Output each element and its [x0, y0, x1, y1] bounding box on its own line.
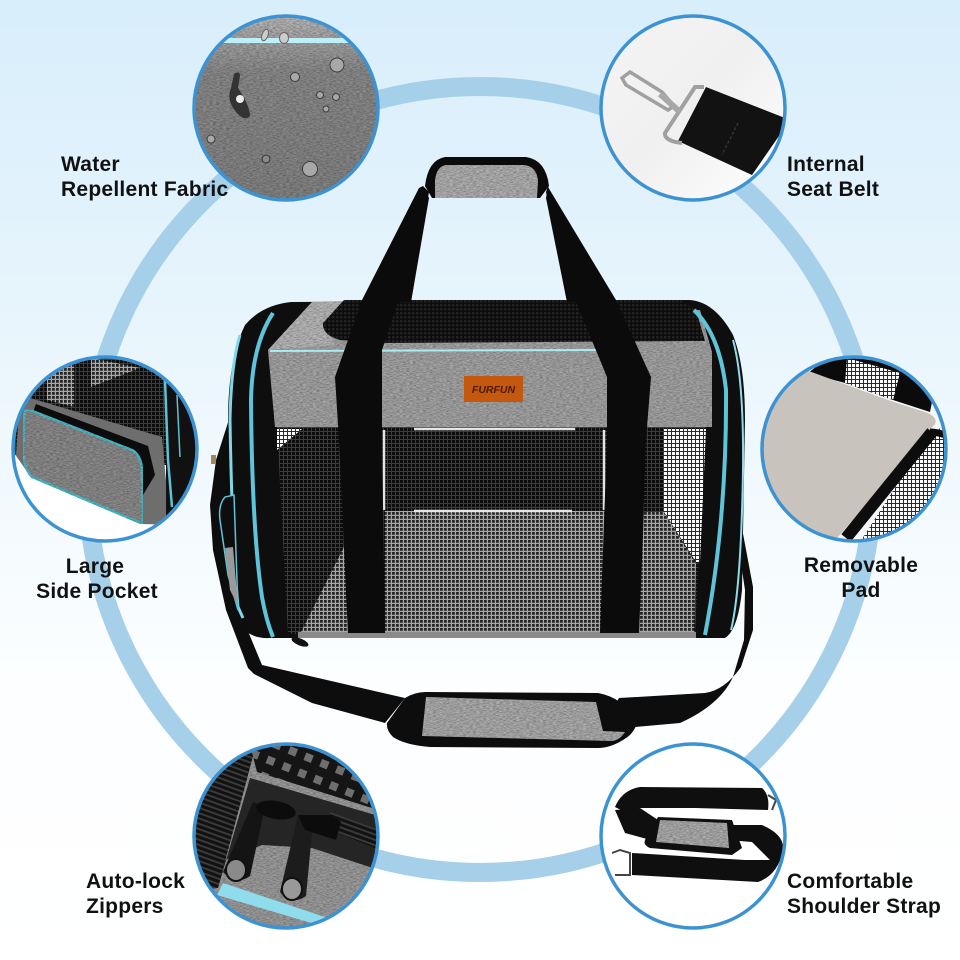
connecting ring — [87, 86, 873, 872]
detail: auto-lock zippers — [190, 740, 385, 935]
label: large side pocket: Side Pocket — [36, 580, 158, 603]
label: comfortable shoulder strap: Comfortable — [787, 870, 913, 893]
back of carry straps — [398, 186, 580, 302]
mesh floor — [300, 511, 696, 634]
label: internal seat belt: Seat Belt — [787, 178, 879, 201]
top mesh lid — [323, 300, 705, 343]
label: removable pad: Pad — [841, 579, 881, 602]
label: water repellent fabric: Water — [61, 153, 120, 176]
white mesh right side — [664, 429, 706, 562]
label: auto-lock zippers: Zippers — [86, 895, 164, 918]
bottom fabric strip — [298, 632, 696, 638]
side pocket — [220, 495, 238, 610]
label: internal seat belt: Internal — [787, 153, 865, 176]
light slits in rear window — [384, 429, 604, 511]
brand label — [464, 376, 523, 402]
white mesh left corner — [277, 429, 302, 450]
buckle — [211, 455, 216, 464]
right carry strap — [546, 187, 651, 633]
detail: large side pocket — [10, 355, 200, 560]
grey fabric front — [268, 302, 712, 427]
handle wrap — [425, 157, 549, 198]
detail: comfortable shoulder strap — [601, 744, 785, 928]
handle fabric — [435, 165, 538, 198]
detail: internal seat belt — [601, 16, 790, 200]
pet carrier bag — [211, 157, 745, 649]
label: removable pad: Removable — [804, 554, 918, 577]
carry straps front — [335, 186, 429, 633]
front mesh panel — [277, 427, 706, 634]
light fabric top-left — [268, 302, 344, 350]
label: auto-lock zippers: Auto-lock — [86, 870, 185, 893]
bag body — [228, 300, 745, 638]
detail: removable pad — [755, 356, 950, 550]
teal piping — [251, 313, 273, 637]
label: water repellent fabric: Repellent Fabric — [61, 178, 228, 201]
brand name: FURFUN — [472, 384, 515, 396]
zipper pull — [290, 635, 310, 649]
shoulder strap — [210, 410, 753, 748]
label: comfortable shoulder strap: Shoulder Strap — [787, 895, 941, 918]
detail: water repellent fabric — [190, 14, 382, 204]
label: large side pocket: Large — [66, 555, 124, 578]
side pocket fabric — [225, 547, 238, 606]
